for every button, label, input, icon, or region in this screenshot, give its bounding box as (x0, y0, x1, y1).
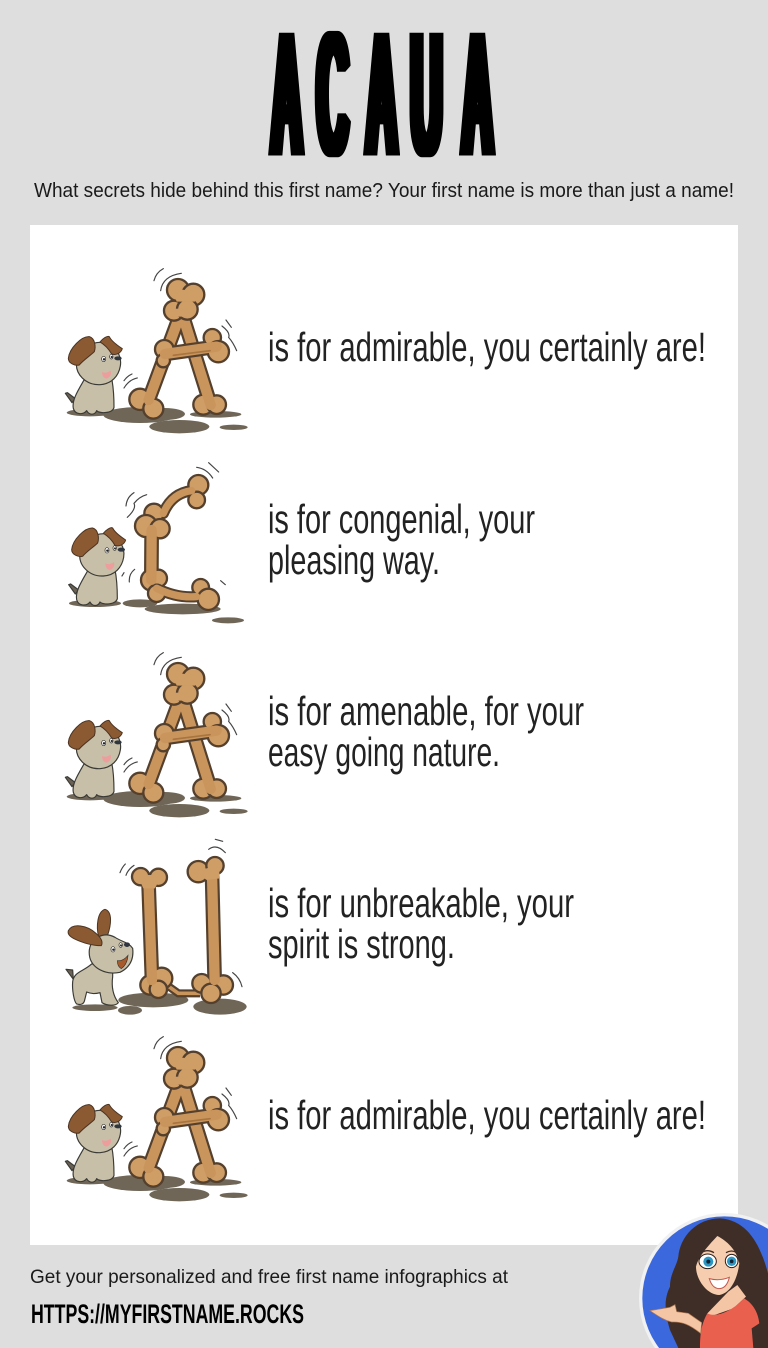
text: C lines: is for congenial, your (268, 496, 535, 542)
avatar: woman in blue circle (639, 1213, 768, 1348)
panel: letters (30, 225, 738, 1245)
text: A line (268, 688, 584, 775)
icon: dog with bone letter U (66, 839, 247, 1015)
subtitle: What secrets hide behind this first name? Your first name is more than just a name! (34, 179, 734, 202)
title: ACAUA (271, 0, 493, 193)
footer text: Get your personalized and free first name infographics at (30, 1266, 509, 1288)
text: U lines: is for unbreakable, your (268, 880, 574, 926)
text: U lines: spirit is strong. (268, 921, 455, 967)
icon: dog with bone letter A (65, 269, 248, 433)
text: C lines: pleasing way. (268, 537, 440, 583)
text: A line: easy going nature. (268, 729, 500, 775)
icon: dog with bone letter A (65, 653, 248, 817)
footer url: HTTPS://MYFIRSTNAME.ROCKS (31, 1299, 304, 1329)
text: U lines (268, 880, 574, 967)
icon: dog with bone letter C (69, 463, 244, 623)
text: C lines (268, 496, 535, 583)
text: A line: is for amenable, for your (268, 688, 584, 734)
icon: dog with bone letter A (65, 1037, 248, 1201)
